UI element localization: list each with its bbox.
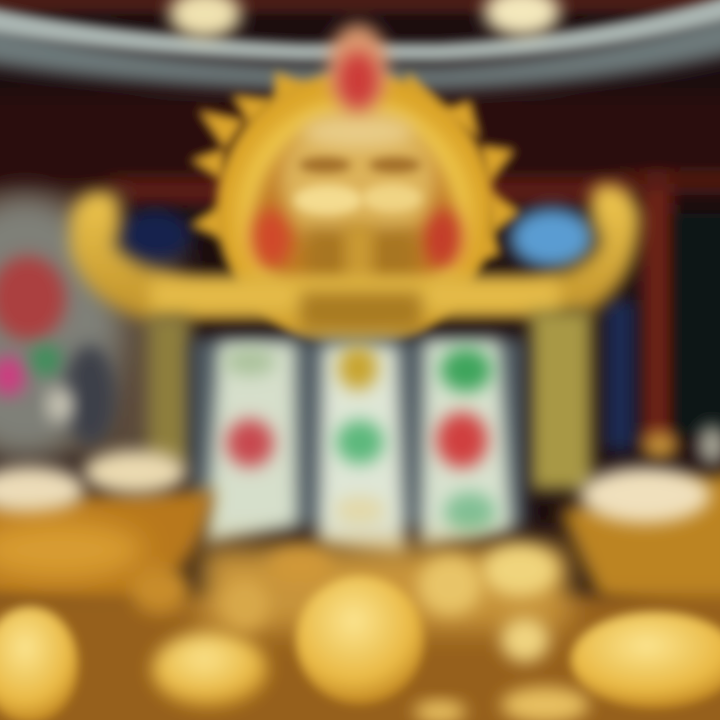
reel 3: [420, 340, 512, 550]
left prize wheel: [0, 195, 120, 455]
red jewel: [328, 24, 388, 112]
reel 1: [205, 342, 298, 545]
reel symbols: [224, 346, 496, 532]
gold coin pile: [0, 544, 720, 720]
right side pillar and dark panel: [605, 172, 720, 450]
reel window: [190, 338, 525, 560]
sun halo with spikes: [190, 72, 520, 348]
ceiling band with lights: [0, 0, 720, 90]
left gold bowl: [0, 450, 215, 610]
right gold bowl: [560, 425, 720, 620]
machine side pillars: [148, 310, 592, 490]
blue side panels: [119, 208, 594, 268]
golden crossbar with horns: [70, 184, 640, 330]
reel 2: [318, 345, 406, 560]
golden figure face: [280, 108, 436, 294]
